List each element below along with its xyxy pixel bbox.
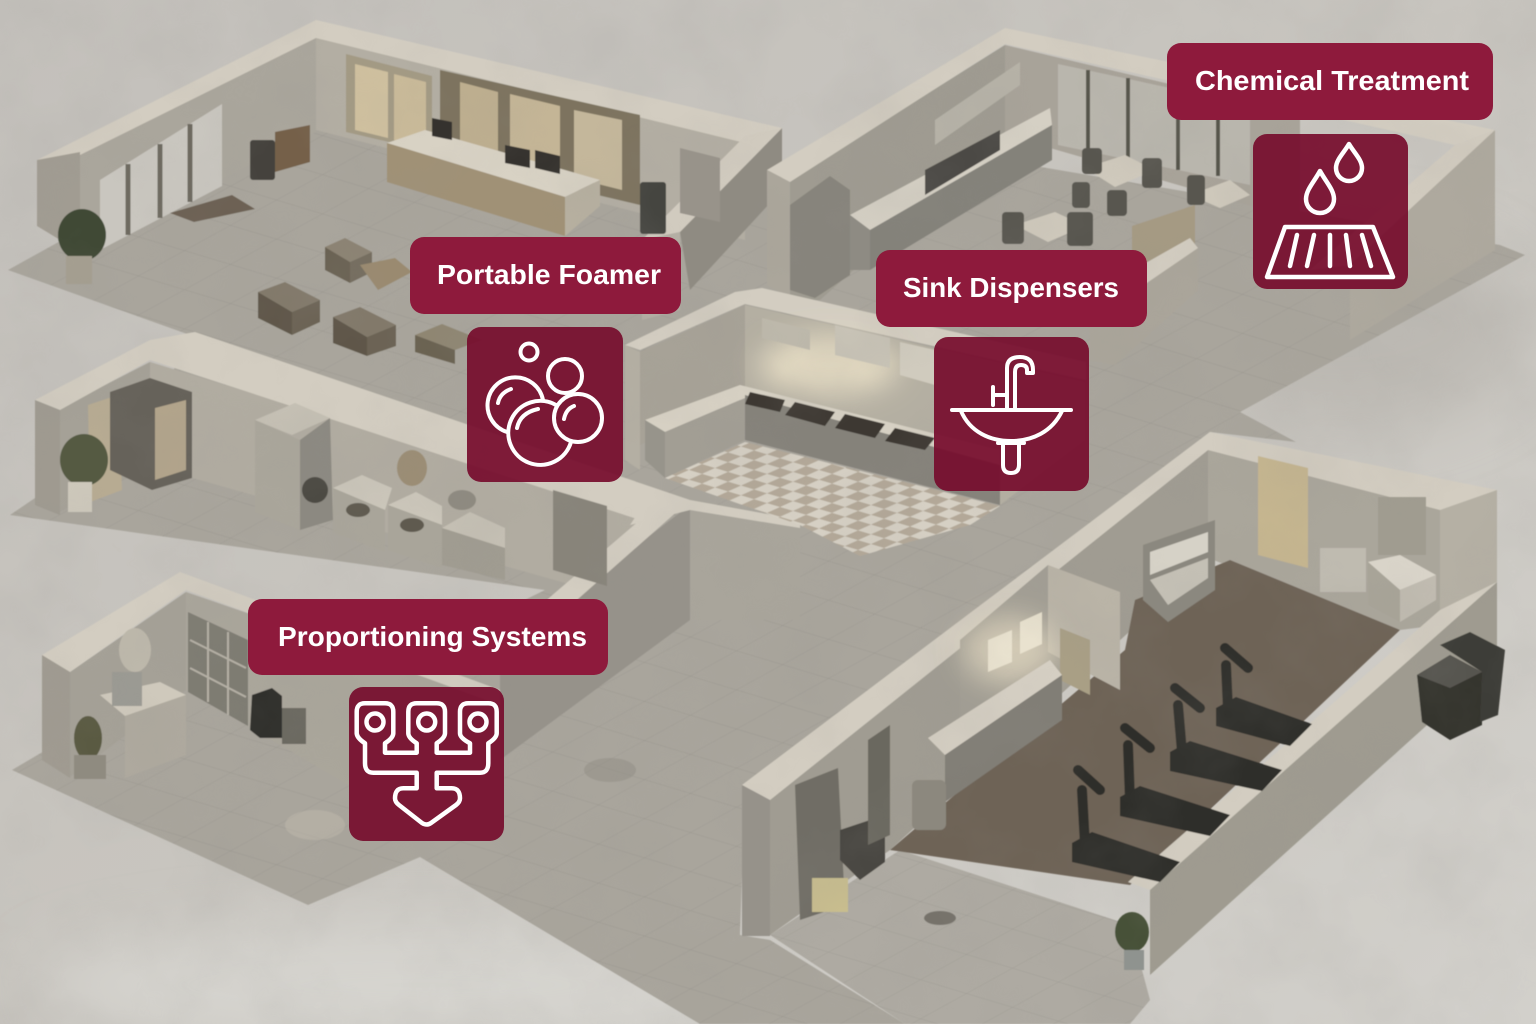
bins and cooler [250,125,666,234]
label: proportioning systems [248,599,608,675]
kitchen checkered floor [665,442,1000,556]
office bins [250,688,306,744]
armchair one [258,282,320,335]
office walls [42,572,500,815]
plant gym [1115,912,1149,970]
service door [553,490,607,586]
trash bins [1417,632,1505,740]
partition wall [960,565,1120,725]
panel: bottom left office [42,572,500,815]
label: portable foamer: Portable Foamer [437,259,661,290]
gym door [1258,456,1308,568]
gym counter [1320,497,1436,622]
reception desk [387,118,600,236]
booth partition [1080,205,1198,365]
armchair two [333,307,396,356]
cabinet and cart [88,378,192,502]
office desk [100,628,186,778]
lounge seating [258,238,482,364]
storage shelves [795,725,890,920]
icon: bubbles [467,327,623,482]
coffee table [360,258,412,290]
label: chemical treatment: Chemical Treatment [1195,65,1469,96]
card: chemical treatment [1167,43,1493,289]
gym laundry counter [912,612,1062,830]
kitchen back wall [625,288,1086,505]
treadmills [1072,648,1312,882]
armchair four [415,324,482,364]
towel shelf [1143,520,1215,622]
kitchen counters [790,62,1052,298]
front wall [1128,490,1497,975]
office plant [74,716,106,779]
icon: drops and floor drain [1253,134,1408,289]
label: portable foamer [410,237,681,314]
plant lobby [58,209,106,284]
windows back [346,54,720,222]
panel: open kitchen and dining [625,28,1495,556]
office shelves [188,612,248,726]
panel: gym room [742,432,1505,975]
label: sink dispensers: Sink Dispensers [903,272,1119,303]
dining room walls [767,28,1495,340]
icon: sink [934,337,1089,491]
label: sink dispensers [876,250,1147,327]
glass doors left [100,104,222,250]
card: sink dispensers [876,250,1147,491]
gym floor [890,560,1400,885]
kitchen counter [645,385,1000,505]
gym walls [742,432,1497,936]
laundry machines [255,403,505,580]
card: portable foamer [410,237,681,482]
door mat [170,195,255,222]
dining furniture [1002,148,1250,246]
panel: lobby room [37,20,782,364]
label: chemical treatment [1167,43,1493,120]
service walls [35,332,800,760]
lobby back walls [37,20,782,320]
icon: manifold with arrow [349,687,504,841]
armchair three [325,238,372,283]
card: proportioning systems [248,599,608,841]
plant service [60,434,108,512]
label: proportioning systems: Proportioning Systems [278,621,587,652]
panel: service room [35,332,800,760]
